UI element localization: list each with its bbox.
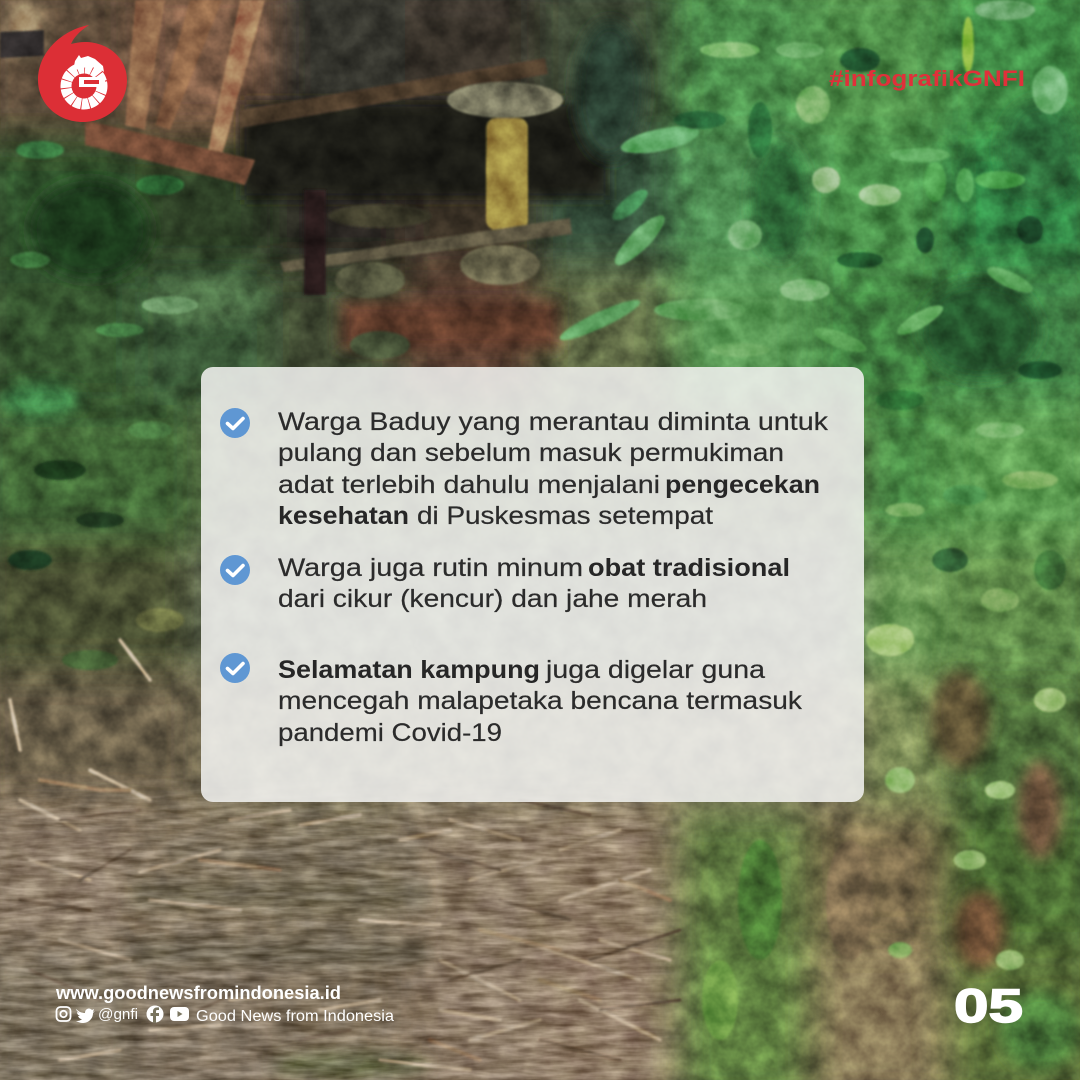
item 3: text: pandemi Covid-19 bbox=[278, 719, 502, 747]
logo: GNFI red speech mark with garuda G bbox=[38, 25, 127, 122]
icon: instagram bbox=[56, 1007, 70, 1021]
item 3: text bbox=[278, 656, 803, 747]
icon: facebook bbox=[146, 1006, 164, 1023]
item 3: text: juga digelar guna bbox=[545, 656, 765, 684]
footer: website and social links: www.goodnewsfromindonesia.id bbox=[55, 983, 341, 1003]
panel: translucent text card bbox=[201, 367, 864, 802]
item 1: text: pengecekan bbox=[665, 471, 820, 499]
item 2: text: Warga juga rutin minum bbox=[278, 554, 583, 582]
item 2: check icon bbox=[220, 555, 250, 585]
footer: website and social links bbox=[55, 983, 394, 1025]
item 3: check icon bbox=[220, 653, 250, 683]
icon: twitter bbox=[76, 1009, 95, 1023]
rice barn pillar bbox=[0, 0, 572, 298]
item 1: text bbox=[278, 408, 829, 530]
item 1: text: adat terlebih dahulu menjalani bbox=[278, 471, 660, 499]
litter texture bbox=[0, 779, 680, 1080]
item 1: text: pulang dan sebelum masuk permukiman bbox=[278, 439, 784, 467]
item 2: text: obat tradisional bbox=[588, 554, 790, 582]
item 1: check icon bbox=[220, 408, 250, 438]
page number: 05 bbox=[954, 979, 1023, 1032]
item 3: text: Selamatan kampung bbox=[278, 656, 540, 684]
item 3: text: mencegah malapetaka bencana termasuk bbox=[278, 687, 803, 715]
item 1: text: Warga Baduy yang merantau diminta untuk bbox=[278, 408, 829, 436]
item 2: text bbox=[278, 554, 790, 613]
page name: Good News from Indonesia bbox=[196, 1008, 394, 1025]
item 2: text: dari cikur (kencur) dan jahe merah bbox=[278, 585, 707, 613]
hashtag: #infografikGNFI bbox=[829, 66, 1025, 91]
item 1: text: kesehatan bbox=[278, 502, 409, 530]
item 1: text: di Puskesmas setempat bbox=[417, 502, 713, 530]
leaf litter on the path bbox=[10, 640, 680, 1070]
handle: @gnfi bbox=[98, 1006, 138, 1023]
icon: youtube bbox=[170, 1007, 189, 1021]
